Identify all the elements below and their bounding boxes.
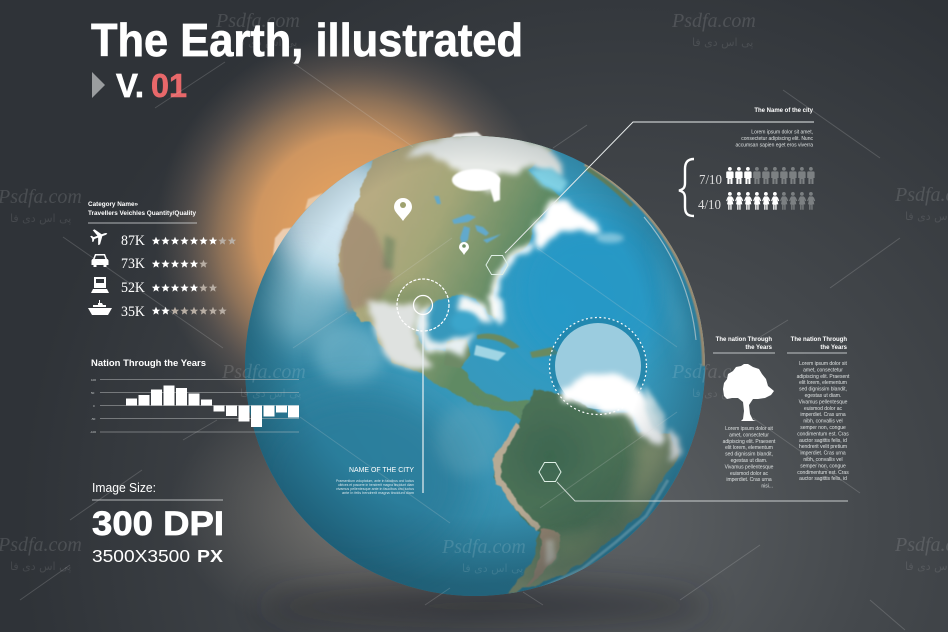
bright atlantic bbox=[514, 212, 666, 348]
column text: adipiscing elit. Praesent bbox=[723, 439, 776, 445]
column text: semper non, congue bbox=[800, 425, 846, 431]
column text: imperdiet. Cras urna bbox=[800, 451, 846, 457]
pale pacific bbox=[270, 140, 400, 290]
column text: elit lorem, elementum bbox=[799, 380, 847, 386]
column text: adipiscing elit. Praesent bbox=[797, 374, 850, 380]
column text: egestas ut diam. bbox=[805, 393, 841, 399]
description text bbox=[735, 130, 813, 148]
column text: condimentum est. Cras bbox=[797, 470, 849, 476]
column text bbox=[797, 361, 850, 482]
column heading bbox=[787, 337, 848, 353]
chart grid bbox=[100, 380, 299, 432]
icon: train bbox=[91, 277, 109, 293]
column text: imperdiet. Cras urna bbox=[726, 477, 772, 483]
ice and snow of the arctic bbox=[403, 131, 563, 196]
panel: name of the city: vivamus pellentesque ante in faucibus orci luctus bbox=[336, 487, 414, 491]
rating rows bbox=[121, 233, 145, 320]
rating rows: 35K bbox=[121, 304, 145, 320]
gulf clouds bbox=[367, 303, 431, 369]
andes bbox=[496, 425, 538, 528]
globe bbox=[245, 128, 705, 596]
version marker: 01 bbox=[151, 67, 187, 104]
column text: nibh, convallis vel bbox=[803, 419, 843, 425]
panel: name of the city: ultrices et posuere in hendrerit magna tincidunt diam bbox=[338, 483, 414, 487]
chart axis labels bbox=[90, 378, 96, 434]
column text: sed dignissim blandit, bbox=[799, 387, 847, 393]
watermarks: Psdfa.com bbox=[0, 186, 82, 208]
panel: the nation right column bbox=[787, 337, 850, 482]
chart axis labels: 100 bbox=[91, 378, 96, 382]
description text: consectetur adipiscing elit. Nunc bbox=[741, 136, 813, 142]
column heading: The nation Through bbox=[716, 337, 772, 343]
big circle highlight bbox=[549, 317, 647, 415]
icon: car bbox=[92, 254, 108, 267]
great lakes bbox=[434, 196, 501, 244]
panel heading: Travellers Veichles Quantity/Quality bbox=[88, 211, 197, 217]
target circle callout bbox=[397, 279, 449, 493]
watermarks: پی اس دی فا bbox=[10, 560, 71, 573]
land sliver on the right limb bbox=[585, 164, 704, 366]
description text: Lorem ipsum dolor sit amet, bbox=[751, 130, 813, 136]
version marker: V. bbox=[116, 67, 144, 104]
icon: plane bbox=[88, 226, 110, 247]
column text: elit lorem, elementum bbox=[725, 445, 773, 451]
star ratings bbox=[152, 237, 236, 315]
south atlantic surf bbox=[540, 480, 668, 589]
description text: accumsan sapien eget eros viverra bbox=[735, 142, 813, 148]
column text: sed dignissim blandit, bbox=[725, 452, 773, 458]
column text: euismod dolor ac bbox=[730, 471, 769, 477]
chart axis labels: 0 bbox=[93, 404, 95, 408]
watermarks: پی اس دی فا bbox=[236, 36, 297, 49]
rockies bbox=[340, 210, 394, 312]
column heading bbox=[713, 337, 775, 353]
ratio labels: 4/10 bbox=[698, 197, 721, 212]
rating rows: 52K bbox=[121, 280, 145, 296]
column text: auctor sagittis felis, id bbox=[799, 438, 847, 444]
column text: nibh, convallis vel bbox=[803, 457, 843, 463]
column text: Lorem ipsum dolor sit bbox=[725, 426, 774, 432]
panel: name of the city bbox=[336, 467, 414, 495]
panel: nation through the years bar chart bbox=[90, 358, 299, 434]
watermarks: Psdfa.com bbox=[671, 361, 756, 383]
chart axis labels: -50 bbox=[91, 417, 96, 421]
pictogram: men bbox=[726, 167, 815, 184]
column text: imperdiet. Cras urna bbox=[800, 412, 846, 418]
column text: nisi... bbox=[761, 484, 773, 490]
panel heading bbox=[88, 202, 197, 223]
column text: Vivamus pellentesque bbox=[799, 399, 848, 405]
panel: image size bbox=[92, 480, 224, 566]
panel: name of the city: Praesentium voluptatum, ante in faucibus orci luctus bbox=[336, 479, 414, 483]
clouds on the horizon bbox=[273, 132, 487, 256]
chart axis labels: -100 bbox=[90, 430, 96, 434]
panel heading: Category Name» bbox=[88, 202, 139, 208]
column text: euismod dolor ac bbox=[804, 406, 843, 412]
icon: small map pin bbox=[459, 242, 469, 255]
title: The Earth, illustrated bbox=[91, 14, 523, 66]
panel: image size: Image Size: bbox=[92, 480, 156, 495]
column text: semper non, congue bbox=[800, 463, 846, 469]
watermarks: Psdfa.com bbox=[441, 536, 526, 558]
panel heading: The Name of the city bbox=[754, 108, 814, 114]
panel: image size: 300 DPI bbox=[92, 505, 224, 543]
watermarks: پی اس دی فا bbox=[692, 36, 753, 49]
bars bbox=[126, 386, 299, 427]
ratio labels: 7/10 bbox=[699, 172, 722, 187]
watermarks: پی اس دی فا bbox=[10, 212, 71, 225]
column text: auctor sagittis felis, id bbox=[799, 476, 847, 482]
watermarks: Psdfa.com bbox=[221, 361, 306, 383]
brace bbox=[679, 159, 694, 216]
column text bbox=[723, 426, 776, 490]
panel: travellers quantity and quality bbox=[88, 202, 236, 320]
pictogram: women bbox=[726, 192, 815, 210]
ratio labels bbox=[698, 172, 722, 212]
watermarks: Psdfa.com bbox=[215, 10, 300, 32]
watermarks: Psdfa.com bbox=[671, 10, 756, 32]
land: south america bbox=[495, 388, 680, 595]
dashed circle highlight bbox=[550, 318, 646, 414]
watermarks: Psdfa.com bbox=[0, 534, 82, 556]
labrador sea bbox=[528, 168, 568, 194]
icon: large map pin bbox=[394, 198, 412, 221]
column text: Vivamus pellentesque bbox=[725, 464, 774, 470]
column text: egestas ut diam. bbox=[731, 458, 767, 464]
chart axis labels: 50 bbox=[91, 391, 95, 395]
east coast surf and clouds bbox=[494, 243, 531, 318]
column text: condimentum est. Cras bbox=[797, 431, 849, 437]
land: north america bbox=[338, 128, 560, 420]
column heading: the Years bbox=[820, 345, 848, 351]
south hexagon callout bbox=[539, 462, 848, 501]
rating rows: 73K bbox=[121, 256, 145, 272]
panel: image size: PX bbox=[197, 546, 223, 566]
chart heading: Nation Through the Years bbox=[91, 358, 206, 369]
caribbean islands bbox=[474, 334, 560, 361]
icon: tree bbox=[723, 364, 774, 421]
map markers bbox=[394, 122, 848, 501]
panel: name of the city: ante in felis hendrerit magna tincidunt diam bbox=[342, 491, 414, 495]
watermarks: پی اس دی فا bbox=[692, 387, 753, 400]
column heading: the Years bbox=[745, 345, 773, 351]
north hexagon callout bbox=[486, 122, 814, 274]
watermarks: پی اس دی فا bbox=[462, 562, 523, 575]
panel: city statistics bbox=[679, 108, 815, 216]
icon: ship bbox=[88, 300, 112, 315]
panel: the nation left column bbox=[713, 337, 776, 490]
panel: name of the city: NAME OF THE CITY bbox=[349, 467, 414, 474]
amazon clouds bbox=[560, 372, 665, 445]
version marker bbox=[92, 67, 187, 104]
panel: image size: 3500X3500 bbox=[92, 546, 190, 566]
column text: hendrerit velit pretium bbox=[799, 444, 847, 450]
title bbox=[91, 14, 523, 104]
green central-america and yucatan bbox=[454, 348, 470, 368]
column text: amet, consectetur bbox=[729, 432, 769, 438]
watermarks: پی اس دی فا bbox=[240, 387, 301, 400]
column text: amet, consectetur bbox=[803, 367, 843, 373]
column text: Lorem ipsum dolor sit bbox=[799, 361, 848, 367]
rating rows: 87K bbox=[121, 233, 145, 249]
column heading: The nation Through bbox=[791, 337, 847, 343]
